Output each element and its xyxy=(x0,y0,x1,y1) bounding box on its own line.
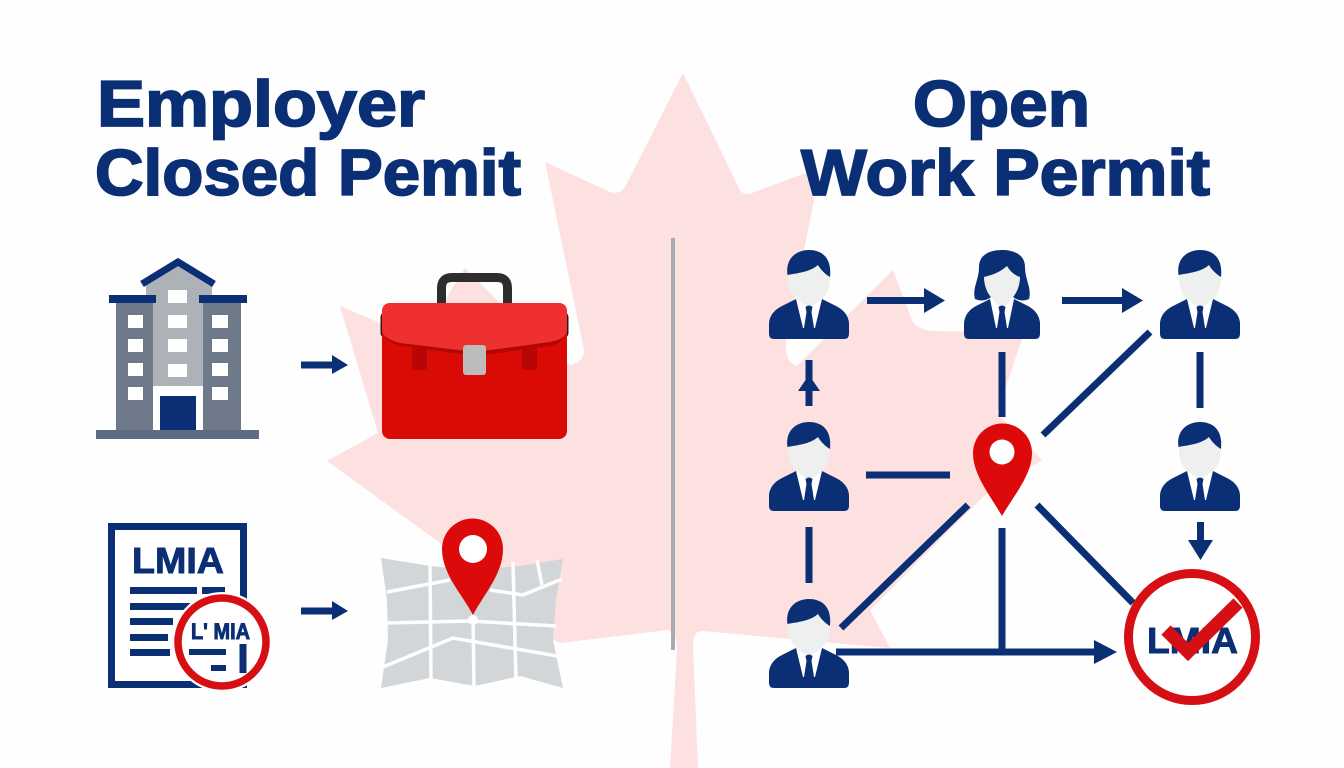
divider xyxy=(671,238,675,650)
person: top left xyxy=(769,250,849,339)
person: middle left xyxy=(769,422,849,511)
arrow: upward xyxy=(798,360,820,406)
person: top right xyxy=(1160,250,1240,339)
network: connectors and arrows xyxy=(798,288,1213,664)
icon: LMIA approved stamp: LMIA xyxy=(1147,620,1238,661)
arrow: downward xyxy=(1188,522,1213,560)
arrow: document to map xyxy=(301,601,348,620)
stamp circle xyxy=(175,595,269,689)
person: middle right xyxy=(1160,422,1240,511)
icon: office building xyxy=(96,262,259,439)
arrow: to LMIA approved xyxy=(836,640,1117,664)
connector lines xyxy=(809,332,1200,652)
arrow: woman to person xyxy=(1062,288,1143,313)
person: top centre woman xyxy=(964,250,1040,339)
icon: LMIA document with stamp xyxy=(112,526,269,689)
stamp circle: L' MIA xyxy=(191,619,250,644)
heading: Open Work Permit xyxy=(801,67,1210,209)
icon: red briefcase xyxy=(380,278,568,439)
heading: Open Work Permit: Open xyxy=(913,67,1090,140)
document title: LMIA xyxy=(132,540,224,581)
background: maple leaf watermark xyxy=(327,73,1042,768)
icon: map with pin xyxy=(381,518,563,690)
map pin xyxy=(442,518,503,615)
heading: Open Work Permit: Work Permit xyxy=(801,136,1210,209)
heading: Employer Closed Permit: Closed Pemit xyxy=(95,136,521,209)
arrow: building to briefcase xyxy=(301,355,348,374)
document text lines xyxy=(130,587,225,656)
icon: central location pin xyxy=(973,424,1032,516)
heading: Employer Closed Permit: Employer xyxy=(97,67,425,140)
person: bottom left xyxy=(769,599,849,688)
icon: LMIA approved stamp xyxy=(1128,574,1256,700)
heading: Employer Closed Permit xyxy=(95,67,521,209)
arrow: person to woman xyxy=(867,288,945,313)
